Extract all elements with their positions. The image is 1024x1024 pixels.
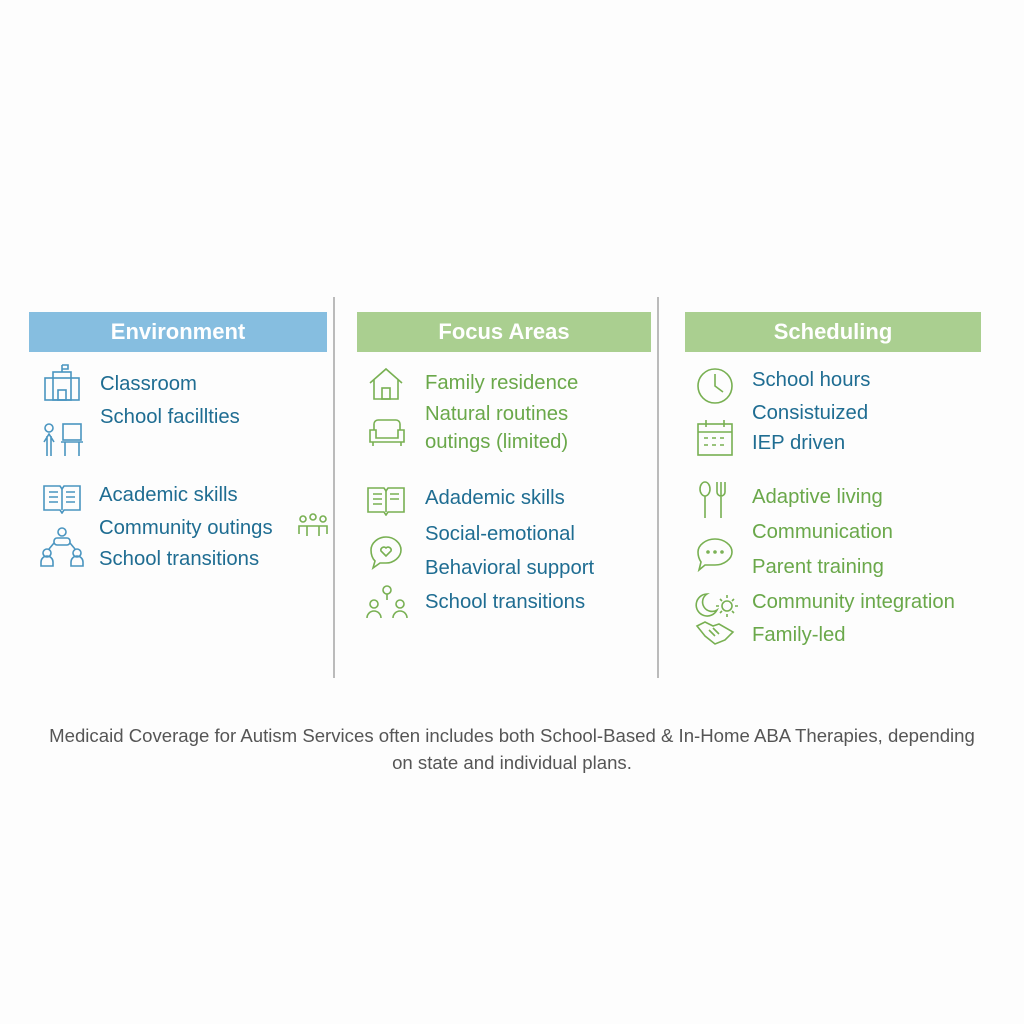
- text: classroom: Classroom: [100, 373, 197, 395]
- icon: calendar: [697, 420, 733, 456]
- icon: handshake: [696, 621, 734, 645]
- text: natural routines: Natural routines: [425, 403, 568, 425]
- icon: sofa: [369, 419, 405, 446]
- heading: environment: [29, 312, 327, 352]
- text: behavioral support: Behavioral support: [425, 557, 594, 579]
- text: social emotional: Social-emotional: [425, 523, 575, 545]
- icon: moon sun: [695, 593, 738, 617]
- icon: school: [44, 364, 80, 401]
- heading: environment: Environment: [111, 319, 245, 344]
- icon: child desk: [43, 423, 83, 456]
- text: academic skills: Adademic skills: [425, 487, 565, 509]
- caption: Medicaid Coverage for Autism Services often includes both School-Based & In-Home ABA Therapies, depending: [49, 725, 975, 746]
- icon: book: [43, 485, 81, 514]
- text: iep driven: IEP driven: [752, 432, 845, 454]
- text: academic skills: Academic skills: [99, 484, 238, 506]
- heading: scheduling: [685, 312, 981, 352]
- heading: focus areas: [357, 312, 651, 352]
- caption: on state and individual plans.: [392, 752, 632, 773]
- icon: people: [366, 585, 408, 618]
- text: parent training: Parent training: [752, 556, 884, 578]
- heading: focus areas: Focus Areas: [438, 319, 570, 344]
- caption: [49, 725, 975, 773]
- icon: network people: [40, 527, 84, 567]
- text: community outings: Community outings: [99, 517, 273, 539]
- text: family led: Family-led: [752, 624, 846, 646]
- text: consistuized: Consistuized: [752, 402, 868, 424]
- icon: house: [370, 368, 402, 400]
- icon: heart bubble: [370, 536, 402, 570]
- icon: utensils: [699, 481, 726, 518]
- icon: book: [367, 487, 405, 516]
- icon: speech bubble: [697, 538, 733, 572]
- text: community integration: Community integration: [752, 591, 955, 613]
- text: school facilities: School facillties: [100, 406, 240, 428]
- text: family residence: Family residence: [425, 372, 578, 394]
- panel: scheduling: [685, 312, 981, 646]
- icon: clock: [697, 368, 733, 404]
- text: school hours: School hours: [752, 369, 870, 391]
- text: adaptive living: Adaptive living: [752, 486, 883, 508]
- text: communication: Communication: [752, 521, 893, 543]
- text: outings limited: outings (limited): [425, 431, 568, 453]
- heading: scheduling: Scheduling: [774, 319, 892, 344]
- text: school transitions: School transitions: [99, 548, 259, 570]
- panel: focus areas: [357, 312, 651, 618]
- icon: family: [298, 513, 328, 536]
- panel: environment: [29, 312, 328, 570]
- text: school transitions: School transitions: [425, 591, 585, 613]
